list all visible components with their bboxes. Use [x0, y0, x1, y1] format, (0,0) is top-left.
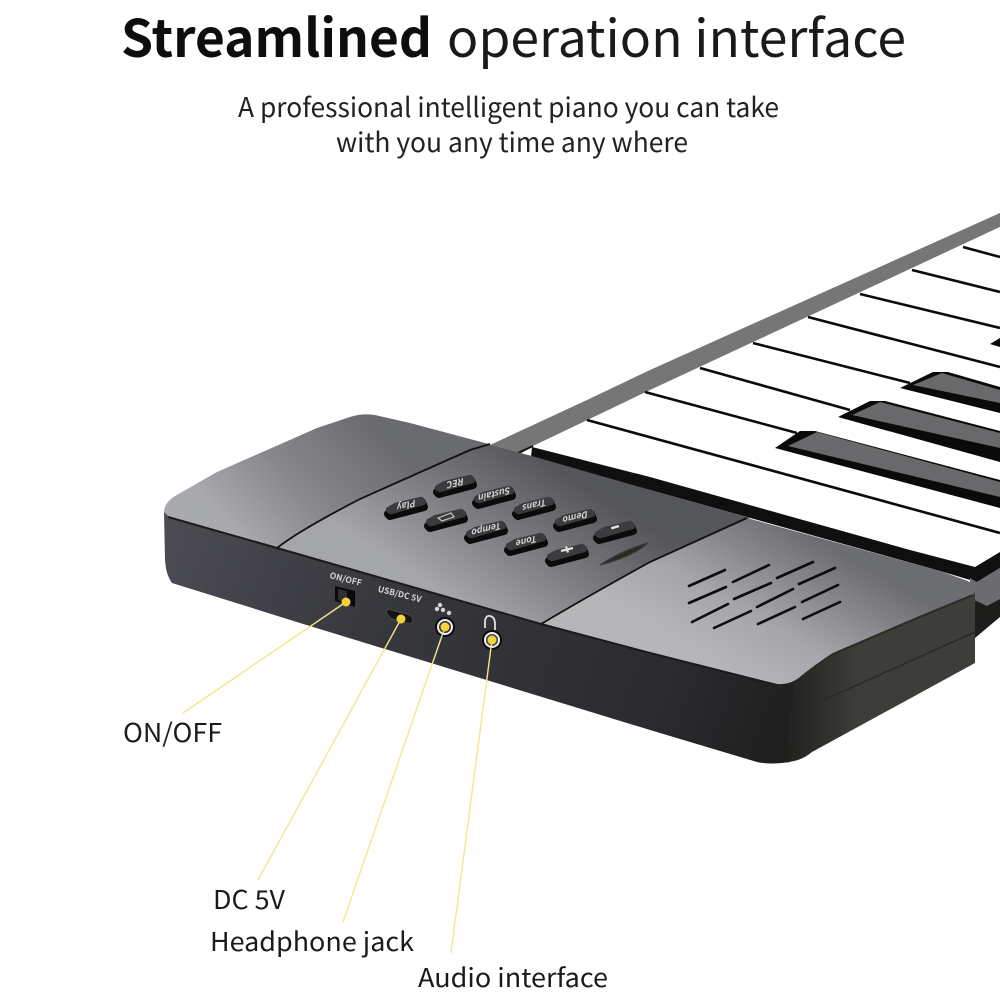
- top surface left panel: [164, 414, 500, 547]
- keyboard grey top strip: [490, 213, 1000, 454]
- top surface right panel: [541, 518, 975, 684]
- label: Headphone jack: Headphone jack: [210, 922, 415, 959]
- label: Audio interface: Audio interface: [418, 958, 608, 995]
- port: headphone jack: [482, 630, 502, 650]
- icon: headphones: [485, 616, 495, 630]
- label: ON/OFF: ON/OFF: [123, 713, 222, 750]
- port: USB/DC 5V: USB/DC 5V: [377, 583, 423, 605]
- key: plus: [549, 546, 585, 563]
- subtitle: with you any time any where: [336, 121, 688, 160]
- key: Play: [388, 496, 424, 516]
- panel seams: [277, 444, 747, 624]
- subtitle: A professional intelligent piano you can take: [238, 86, 779, 125]
- speaker grille: [689, 562, 840, 628]
- port: on/off switch: [328, 569, 363, 607]
- strap black edge: [970, 598, 1000, 638]
- top surface middle panel: [277, 445, 750, 623]
- key: Sustain: Sustain: [477, 484, 510, 506]
- callout dots: [342, 598, 496, 644]
- black key 4: [990, 338, 1000, 347]
- key: Tone: Tone: [515, 532, 537, 552]
- key: metronome: [428, 512, 464, 528]
- control box body: [164, 414, 975, 764]
- label: DC 5V: DC 5V: [213, 880, 285, 917]
- right side seam: [797, 632, 975, 712]
- front top edge highlight: [168, 517, 777, 685]
- title: [121, 0, 906, 72]
- key: Tempo: Tempo: [471, 519, 501, 541]
- roll-up piano keyboard: [490, 213, 1000, 638]
- subtitle: [238, 86, 779, 160]
- microphone slot: [600, 543, 648, 565]
- port: audio jack: [435, 617, 455, 637]
- key: REC: [437, 475, 473, 494]
- white keys: [533, 227, 1000, 568]
- port panel: [328, 569, 502, 650]
- keyboard black front band: [531, 447, 1000, 582]
- strap end panel: [970, 568, 1000, 607]
- black key 1: [775, 431, 1000, 508]
- key: Trans: [516, 496, 552, 516]
- callout leader lines: [183, 602, 492, 953]
- small black seam at keyboard corner: [518, 446, 533, 453]
- key divider lines: [587, 247, 1000, 533]
- key: minus: [597, 524, 633, 540]
- port: USB/DC 5V: [377, 583, 423, 624]
- button pad: [388, 475, 648, 565]
- icon: audio in: [435, 603, 451, 615]
- key: Trans: Trans: [521, 496, 546, 516]
- key: Tone: [508, 532, 544, 552]
- front face: [164, 512, 800, 764]
- key: Play: Play: [395, 496, 416, 516]
- black key 2: [838, 401, 1000, 462]
- key: Demo: Demo: [562, 508, 588, 528]
- right top edge shadow: [800, 595, 973, 678]
- right side face: [785, 590, 975, 762]
- black key 3: [900, 372, 1000, 413]
- port: on/off switch: ON/OFF: [328, 569, 363, 589]
- key: REC: REC: [446, 475, 464, 493]
